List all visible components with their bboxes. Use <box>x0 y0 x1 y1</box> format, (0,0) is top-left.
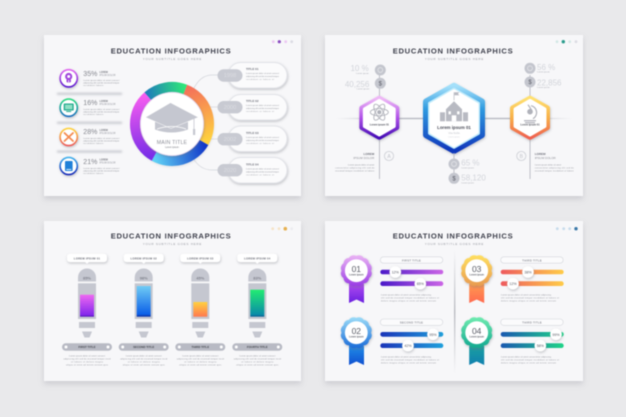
metrics left: Lorem ipsum <box>356 72 369 75</box>
timeline card 3 <box>218 126 287 152</box>
stat row 1 <box>60 70 120 87</box>
timeline card 3: incididunt ut labore et <box>246 142 274 145</box>
bars group 01: Lorem ipsum dolor sit amet consectetur adipiscing <box>381 294 432 296</box>
section A text: consectetur adipiscing elit sed do <box>335 166 375 170</box>
section A text: IPSUM DOLOR <box>353 156 375 160</box>
stat row 4: Lorem ipsum dolor sit amet consect <box>83 167 120 170</box>
pencil gauge 2: 98% <box>140 276 148 280</box>
timeline card 2: adipiscing elit sed do eiusmod tempor <box>246 107 279 110</box>
icon: graduation cap <box>146 103 198 135</box>
metrics right: Lorem ipsum <box>537 70 550 74</box>
pencil gauge 4: 83% <box>253 276 262 280</box>
bars group 02: dolore magna aliqua ut enim ad minim veniam <box>381 362 436 364</box>
metrics right: $ <box>528 80 532 86</box>
panel: badges and bars infographic <box>325 221 583 381</box>
title pill 3: ut labore et dolore magna <box>184 360 217 364</box>
pagination dots <box>272 40 293 43</box>
timeline card 4 <box>218 158 287 183</box>
hexagon left: science: Lorem ipsum 01 <box>370 124 389 127</box>
bars group 03: THIRD TITLE <box>522 258 542 262</box>
pencil gauge 4 <box>237 254 277 338</box>
bars group 03: elit sed do eiusmod tempor incididunt ut labore et <box>501 296 559 300</box>
stat row 3: LOREM <box>100 130 108 132</box>
icon: microscope <box>524 105 537 123</box>
donut chart: Lorem ipsum <box>165 146 179 149</box>
heading: EDUCATION INFOGRAPHICS <box>111 232 231 241</box>
stat row 4: incididunt labore <box>83 172 104 175</box>
metrics left: $ <box>379 82 383 88</box>
bars group 02 <box>380 319 443 364</box>
title pill 3: adipiscing elit sed do eiusmod tempor incid <box>177 358 225 360</box>
bars group 02: Lorem ipsum dolor sit amet consectetur adipiscing <box>381 356 432 358</box>
title pill 2 <box>119 343 169 366</box>
stat row 4: adipiscing elit sed do eiusmod tempor <box>83 170 120 173</box>
stat row 1: Lorem ipsum dolor sit amet consect <box>83 79 120 82</box>
icon: atom <box>370 103 388 122</box>
timeline card 2: incididunt ut labore et <box>246 110 274 113</box>
bars group 03: dolore magna aliqua ut enim ad minim veniam <box>501 300 556 302</box>
donut chart <box>130 82 214 166</box>
title pill 3: Lorem ipsum dolor sit amet consect <box>182 354 219 358</box>
donut chart: MAIN TITLE <box>157 140 188 146</box>
timeline card 1: TITLE 01 <box>246 67 259 71</box>
center divider <box>454 250 455 374</box>
timeline card 1: 1998 <box>224 73 236 79</box>
badge 03: 03 <box>472 264 482 274</box>
title pill 3: THIRD TITLE <box>191 345 209 349</box>
icon: award <box>65 73 72 83</box>
bars group 04: dolore magna aliqua ut enim ad minim veniam <box>501 362 556 364</box>
pagination dots <box>556 40 577 43</box>
stat row 1: incididunt labore <box>83 84 104 87</box>
title pill 1: Lorem ipsum dolor sit amet consect <box>69 354 105 358</box>
section A text <box>335 151 394 172</box>
badge 03: Lorem ipsum <box>469 274 484 276</box>
stat row 1: LOREM <box>100 72 108 74</box>
bars group 04: 58% <box>537 344 545 348</box>
pencil gauge 3: LOREM IPSUM 03 <box>187 256 214 260</box>
section B text: eiusmod tempor incididunt ut labore <box>535 170 574 172</box>
title pill 1: aliqua ut enim ad minim veniam quis <box>66 364 109 366</box>
section B text: IPSUM DOLOR <box>535 156 557 160</box>
bars group 01: 12% <box>392 270 400 274</box>
metrics center: $ <box>452 176 456 182</box>
panel: donut chart infographic <box>44 35 301 196</box>
badge 04: 04 <box>472 326 482 336</box>
stat row 1: 35% <box>83 71 97 78</box>
title pill 4: adipiscing elit sed do eiusmod tempor incid <box>234 358 282 360</box>
bars group 03: 38% <box>524 270 532 274</box>
badge 01: 01 <box>352 264 361 274</box>
heading: EDUCATION INFOGRAPHICS <box>111 46 231 55</box>
timeline card 1: incididunt ut labore et <box>246 78 274 81</box>
section B text: consectetur adipiscing elit sed do <box>535 166 574 170</box>
heading: EDUCATION INFOGRAPHICS <box>393 46 513 55</box>
bars group 01 <box>380 257 443 302</box>
stat row 2: 16% <box>83 100 97 107</box>
timeline card 3: adipiscing elit sed do eiusmod tempor <box>246 139 279 142</box>
pagination dots <box>271 227 293 230</box>
metrics center: 65 % <box>461 158 480 168</box>
badge 01: Lorem ipsum <box>349 274 364 276</box>
title pill 1 <box>62 343 112 366</box>
stat row 2: LOREM <box>100 101 108 103</box>
hexagon right: microscope <box>513 99 547 137</box>
stat row 2: incididunt labore <box>83 113 104 116</box>
timeline card 3: TITLE 03 <box>246 131 259 135</box>
hexagon left: science <box>362 99 396 137</box>
stat row 3: Lorem ipsum dolor sit amet consect <box>83 137 120 140</box>
section A text: Lorem ipsum dolor sit amet <box>348 164 375 166</box>
pencil gauge 3 <box>180 254 220 338</box>
connector lines <box>193 75 218 170</box>
metrics left: 40,256 <box>345 80 370 89</box>
bars group 01: 65% <box>417 282 425 286</box>
section B text: Lorem ipsum dolor sit amet <box>535 164 561 166</box>
pagination dots <box>556 227 578 230</box>
panel: pencil gauges infographic <box>44 221 301 381</box>
hexagon center: school: Lorem ipsum 01 <box>437 125 471 130</box>
stat row 2: adipiscing elit sed do eiusmod tempor <box>83 111 120 114</box>
badge 01 <box>341 255 372 303</box>
stat row 4: IPSUM DOLOR <box>100 162 116 164</box>
badge 02: Lorem ipsum <box>349 336 364 338</box>
metrics right: 22,856 <box>537 78 562 88</box>
pencil gauge 2 <box>124 254 164 338</box>
metrics right: 56 % <box>537 63 555 72</box>
subtitle: YOUR SUBTITLE GOES HERE <box>425 242 483 246</box>
stat row 3: incididunt labore <box>83 142 104 145</box>
metrics center: Lorem ipsum <box>461 166 474 170</box>
metrics center <box>448 153 486 184</box>
badge 02: 02 <box>352 326 361 336</box>
horizontal axis <box>336 118 572 119</box>
bars group 04: 99% <box>552 333 560 337</box>
section A text: A <box>387 154 391 160</box>
stat row 3: adipiscing elit sed do eiusmod tempor <box>83 140 120 143</box>
timeline card 4: adipiscing elit sed do eiusmod tempor <box>246 170 279 174</box>
title pill 4: ut labore et dolore magna <box>241 360 274 364</box>
metrics left: 10 % <box>350 64 369 73</box>
stat row 4: LOREM <box>100 160 108 162</box>
pencil gauge 1: 85% <box>83 276 91 280</box>
pencil gauge 2: LOREM IPSUM 02 <box>130 256 157 260</box>
title pill 2: ut labore et dolore magna <box>128 360 160 364</box>
bars group 03 <box>501 257 564 302</box>
timeline card 4: Lorem ipsum dolor sit amet consect <box>246 168 279 170</box>
pencil gauge 1 <box>67 254 107 338</box>
timeline card 2: TITLE 02 <box>246 99 259 103</box>
hexagon center: school: Lorem ipsum <box>448 136 460 138</box>
stat row 4 <box>60 157 120 175</box>
badge 04 <box>461 317 492 365</box>
title pill 2: SECOND TITLE <box>133 345 154 349</box>
stat row 2: IPSUM DOLOR <box>100 104 116 106</box>
subtitle: YOUR SUBTITLE GOES HERE <box>143 242 201 246</box>
stat row 3 <box>60 128 120 146</box>
icon: book <box>65 161 73 171</box>
icon: screen <box>64 104 74 112</box>
title pill 1: FIRST TITLE <box>78 345 96 349</box>
title pill 3 <box>175 343 225 366</box>
badge 03 <box>461 255 492 303</box>
bars group 04: elit sed do eiusmod tempor incididunt ut labore et <box>501 358 559 362</box>
heading: EDUCATION INFOGRAPHICS <box>393 232 513 241</box>
pencil gauge 3: 45% <box>196 276 205 280</box>
bars group 01: dolore magna aliqua ut enim ad minim veniam <box>381 300 436 302</box>
timeline card 4: TITLE 04 <box>246 162 259 166</box>
bars group 02: SECOND TITLE <box>400 320 423 324</box>
metrics right: Lorem ipsum <box>537 86 550 89</box>
metrics center: Lorem ipsum <box>461 182 474 184</box>
subtitle: YOUR SUBTITLE GOES HERE <box>425 57 483 61</box>
timeline card 1 <box>218 62 287 88</box>
stat row 4: 21% <box>83 159 97 166</box>
bars group 02: 42% <box>404 344 412 348</box>
metrics right <box>524 63 562 89</box>
badge 04: Lorem ipsum <box>469 336 484 338</box>
section B text: B <box>520 154 524 160</box>
title pill 1: ut labore et dolore magna <box>71 360 104 364</box>
icon: crossed pencils <box>64 133 73 141</box>
hexagon right: microscope: Lorem ipsum 01 <box>520 124 540 127</box>
metrics left: Lorem ipsum <box>357 88 369 90</box>
bars group 03: Lorem ipsum dolor sit amet consectetur adipiscing <box>501 294 552 296</box>
section A text: LOREM <box>363 152 375 156</box>
bars group 03: 12% <box>509 282 517 286</box>
timeline card 3: 2002 <box>224 137 236 143</box>
timeline card 1: adipiscing elit sed do eiusmod tempor <box>246 75 279 78</box>
stat row 2 <box>60 99 120 116</box>
title pill 1: adipiscing elit sed do eiusmod tempor incid <box>64 358 111 360</box>
stat row 1: adipiscing elit sed do eiusmod tempor <box>83 82 120 85</box>
title pill 3: aliqua ut enim ad minim veniam quis <box>179 364 222 366</box>
pencil gauge 4: LOREM IPSUM 04 <box>244 256 271 260</box>
bars group 01: FIRST TITLE <box>402 258 421 262</box>
timeline card 1: Lorem ipsum dolor sit amet consect <box>246 72 279 75</box>
title pill 2: Lorem ipsum dolor sit amet consect <box>126 354 162 358</box>
section B text: LOREM <box>535 152 546 156</box>
stat row 1: IPSUM DOLOR <box>100 75 116 77</box>
badge 02 <box>341 317 372 365</box>
bars group 04: Lorem ipsum dolor sit amet consectetur adipiscing <box>501 356 552 358</box>
title pill 2: adipiscing elit sed do eiusmod tempor incid <box>120 358 168 360</box>
section B text <box>517 151 574 172</box>
timeline card 2 <box>218 94 287 120</box>
vertical stems <box>379 75 530 179</box>
stat row 3: IPSUM DOLOR <box>100 133 116 135</box>
metrics left <box>345 64 386 90</box>
title pill 4: aliqua ut enim ad minim veniam quis <box>236 364 279 366</box>
timeline card 2: 2000 <box>224 105 236 111</box>
title pill 4 <box>232 343 282 366</box>
row separators <box>57 93 122 152</box>
stat row 2: Lorem ipsum dolor sit amet consect <box>83 108 120 111</box>
metrics center: 58,120 <box>461 174 486 182</box>
title pill 2: aliqua ut enim ad minim veniam quis <box>123 364 166 366</box>
bars group 02: elit sed do eiusmod tempor incididunt ut labore et <box>381 358 439 362</box>
stat row 3: 28% <box>83 129 97 136</box>
bars group 04 <box>501 319 564 364</box>
timeline card 2: Lorem ipsum dolor sit amet consect <box>246 104 279 107</box>
bars group 02: 95% <box>429 333 437 337</box>
hexagon center: school: Vita Nullis <box>448 131 460 135</box>
pencil gauge 1: LOREM IPSUM 01 <box>74 256 100 260</box>
timeline card 4: incididunt ut labore et <box>246 174 274 176</box>
section A text: eiusmod tempor incididunt ut labore <box>335 170 375 172</box>
bars group 04: THIRD TITLE <box>522 320 542 324</box>
timeline card 3: Lorem ipsum dolor sit amet consect <box>246 136 279 139</box>
timeline card 4: 2020 <box>224 168 236 174</box>
panel: hexagon infographic <box>325 35 583 196</box>
icon: school building <box>440 92 468 121</box>
title pill 4: FOURTH TITLE <box>247 345 268 349</box>
subtitle: YOUR SUBTITLE GOES HERE <box>143 57 201 61</box>
bars group 01: elit sed do eiusmod tempor incididunt ut labore et <box>381 296 439 300</box>
title pill 4: Lorem ipsum dolor sit amet consect <box>239 354 276 358</box>
hexagon center: school <box>426 86 482 150</box>
